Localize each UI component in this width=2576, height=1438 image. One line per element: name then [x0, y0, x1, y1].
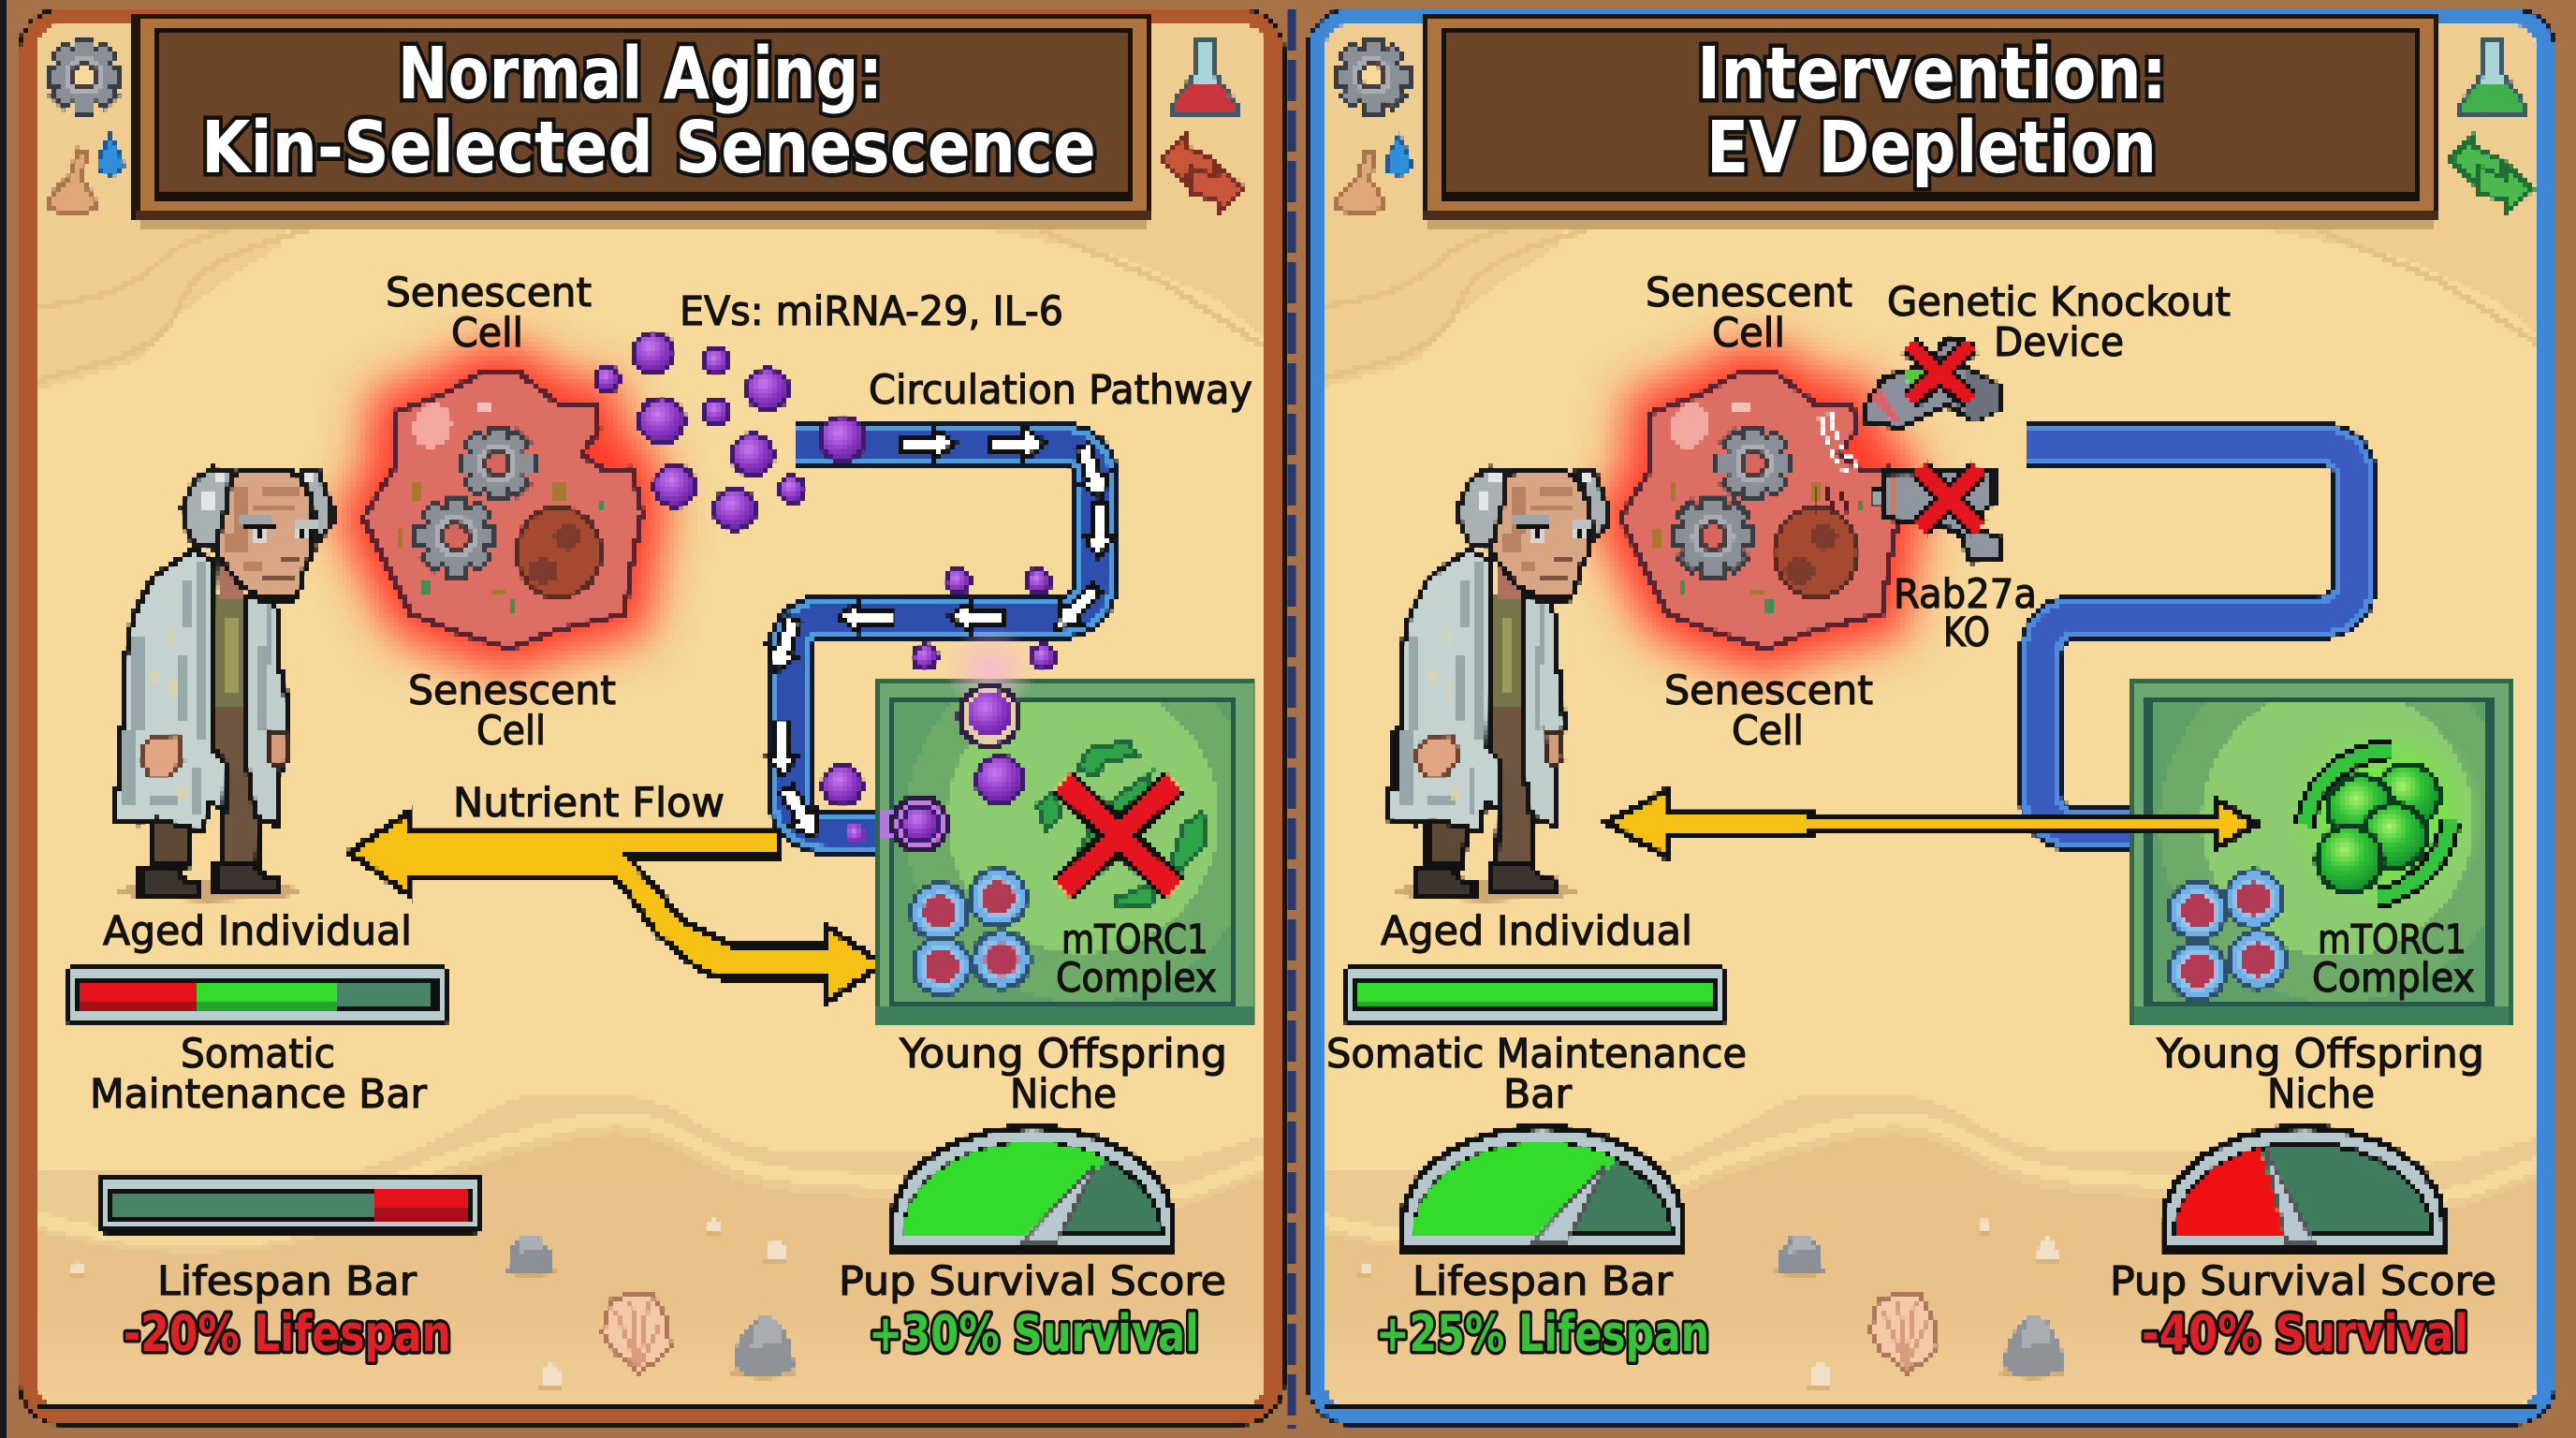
yellow nutrient flow double arrow: [1606, 790, 2257, 858]
label: Rab27a KO: [1894, 571, 2037, 656]
label: Rab27a KO: KO: [1943, 609, 1990, 656]
panel frame: [1317, 19, 2546, 1415]
pipe flow arrows: [760, 428, 1117, 844]
title: Kin-Selected Senescence: [201, 107, 1096, 190]
scatter: rocks and shells: [71, 1218, 798, 1388]
icon: gear: [45, 37, 124, 115]
title: [201, 33, 1096, 190]
label: pup survival: Pup Survival Score: [2110, 1258, 2496, 1305]
label: circulation pathway: Circulation Pathway: [869, 367, 1252, 414]
label: senescent cell bottom: Senescent: [408, 668, 616, 714]
EVs along pathway: [820, 417, 1055, 805]
senescent cell: [363, 371, 642, 649]
lifespan gauge: [1402, 1127, 1683, 1250]
blue offspring cells: [2167, 868, 2289, 1002]
title: EV Depletion: [1706, 107, 2157, 190]
label: young offspring niche: Niche: [2267, 1071, 2375, 1118]
label: aged individual: Aged Individual: [103, 908, 412, 955]
blocked mTORC1 complex: [1037, 741, 1206, 908]
pup survival gauge: [892, 1127, 1173, 1250]
centre divider: [1288, 9, 1295, 1429]
label: mTORC1: mTORC1: [2318, 917, 2466, 963]
title: Intervention:: [1697, 33, 2167, 116]
label: mTORC1: mTORC1: [1061, 917, 1208, 963]
label: lifespan: Lifespan Bar: [1412, 1258, 1673, 1305]
label: lifespan: Lifespan Bar: [157, 1258, 417, 1305]
icon: droplet: [1386, 135, 1411, 174]
panel artwork: intervention: [1307, 16, 2552, 1415]
result: survival: -40% Survival: [2142, 1304, 2468, 1363]
blue offspring cells: [909, 867, 1032, 997]
label: mTORC1: [2312, 917, 2475, 1002]
label: young offspring niche: Niche: [1010, 1071, 1117, 1118]
icon: gear: [1333, 37, 1412, 115]
title: Normal Aging:: [398, 33, 883, 116]
label: senescent cell top: [1646, 270, 1852, 357]
banner: [1424, 16, 2437, 230]
panel: intervention: [1307, 16, 2552, 1415]
result: lifespan: -20% Lifespan: [124, 1304, 451, 1363]
label: senescent cell bottom: Cell: [476, 708, 546, 755]
scatter: rocks and shells: [1359, 1218, 2067, 1388]
label: nutrient flow: Nutrient Flow: [453, 780, 724, 827]
yellow nutrient flow arrow: [349, 811, 883, 1004]
icon: pear flask: [1337, 150, 1383, 212]
aged individual figure: [113, 468, 332, 902]
label: somatic maintenance: Maintenance Bar: [90, 1071, 427, 1118]
label: senescent cell bottom: Cell: [1732, 708, 1804, 755]
label: senescent cell bottom: [408, 668, 616, 755]
senescent cell: [1620, 371, 1899, 649]
icon: flask red: [1171, 37, 1238, 114]
panel: normal aging: [28, 16, 1274, 1415]
label: Rab27a KO: Rab27a: [1894, 571, 2037, 618]
label: somatic maintenance: [90, 1031, 427, 1118]
label: EVs: EVs: miRNA-29, IL-6: [680, 288, 1063, 335]
label: senescent cell top: [386, 270, 592, 357]
label: senescent cell bottom: [1664, 668, 1873, 755]
knockout device top: [1866, 337, 2000, 428]
panel artwork: normal aging: [28, 16, 1274, 1415]
label: pup survival: Pup Survival Score: [839, 1258, 1226, 1305]
label: senescent cell top: Senescent: [1646, 270, 1852, 316]
sand: [28, 19, 1273, 1414]
label: aged individual: Aged Individual: [1381, 908, 1692, 955]
somatic maintenance bar: [67, 968, 447, 1022]
label: senescent cell top: Cell: [1712, 310, 1785, 357]
label: young offspring niche: Young Offspring: [899, 1031, 1227, 1078]
EV particles: [595, 332, 805, 530]
pup survival gauge: [2163, 1127, 2444, 1250]
label: young offspring niche: [2156, 1031, 2484, 1118]
label: somatic maintenance: Bar: [1503, 1071, 1572, 1118]
icon: pear flask: [49, 150, 95, 212]
niche box: [2132, 646, 2515, 1024]
label: senescent cell top: Cell: [451, 310, 523, 357]
sand: [1307, 19, 2552, 1414]
active mTORC1 complex: [2305, 749, 2450, 899]
label: senescent cell top: Senescent: [386, 270, 592, 316]
niche box: [876, 646, 1261, 1024]
label: mTORC1: Complex: [1056, 955, 1217, 1002]
icon: flask green: [2459, 37, 2526, 114]
banner: [136, 16, 1149, 230]
label: somatic maintenance: Somatic Maintenance: [1326, 1031, 1747, 1078]
label: somatic maintenance: Somatic: [181, 1031, 335, 1078]
EV ports: [845, 686, 1023, 851]
red X: [1062, 782, 1175, 889]
label: somatic maintenance: [1326, 1031, 1747, 1118]
circulation pipe: [790, 445, 1096, 832]
panel frame: [29, 19, 1274, 1415]
label: genetic knockout device: [1887, 279, 2231, 366]
result: lifespan: +25% Lifespan: [1376, 1304, 1709, 1363]
aged individual figure: [1389, 468, 1608, 902]
label: young offspring niche: Young Offspring: [2156, 1031, 2484, 1078]
icon: droplet: [98, 135, 123, 174]
lifespan bar: [100, 1177, 480, 1231]
label: senescent cell bottom: Senescent: [1664, 668, 1873, 714]
empty circulation pipe: [2025, 445, 2355, 829]
result: survival: +30% Survival: [869, 1304, 1199, 1363]
knockout device bottom: [1872, 468, 2000, 562]
pink emission glow: [944, 627, 1037, 712]
damage marks: [1821, 412, 1857, 473]
label: mTORC1: Complex: [2312, 955, 2475, 1002]
genetic edit scribble: [1816, 485, 1849, 515]
icon: swap arrows red: [1162, 135, 1244, 213]
title: [1697, 33, 2167, 190]
label: young offspring niche: [899, 1031, 1227, 1118]
label: genetic knockout device: Genetic Knockout: [1887, 279, 2231, 326]
icon: swap arrows green: [2450, 135, 2532, 213]
label: genetic knockout device: Device: [1994, 319, 2124, 366]
label: mTORC1: [1056, 917, 1217, 1002]
somatic maintenance bar: [1345, 968, 1725, 1022]
